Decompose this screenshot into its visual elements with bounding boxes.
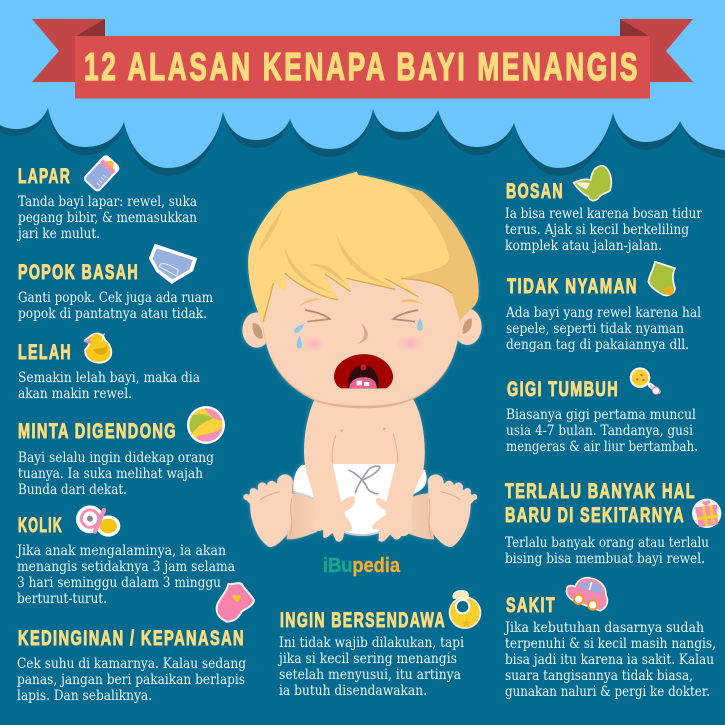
icon: baby onesie xyxy=(217,583,254,622)
icon: rubber duck xyxy=(83,333,111,363)
text: Bosan: komplek atau jalan-jalan. xyxy=(505,238,662,254)
text: Minta digendong: Bayi selalu ingin didekap orang xyxy=(18,450,214,466)
icon: rattle xyxy=(631,368,660,394)
section: Sakit xyxy=(503,594,716,700)
text: Minta digendong: Bunda dari dekat. xyxy=(18,482,127,498)
text: Lapar: jari ke mulut. xyxy=(16,226,100,242)
text: Kolik: menangis setidaknya 3 jam selama xyxy=(17,559,235,575)
heading: Kolik: KOLIK xyxy=(18,514,63,537)
heading: Gigi tumbuh: GIGI TUMBUH xyxy=(507,378,619,401)
icon: gift box xyxy=(692,499,721,528)
section: Kolik xyxy=(15,514,235,607)
text: Sakit: Jika kebutuhan dasarnya sudah xyxy=(503,620,704,636)
open mouth xyxy=(334,354,393,388)
heading: Lelah: LELAH xyxy=(18,341,72,364)
heading: Tidak nyaman: TIDAK NYAMAN xyxy=(507,275,638,298)
text: Lelah: Semakin lelah bayi, maka dia xyxy=(18,370,200,386)
text: Ingin bersendawa: Ini tidak wajib dilakukan, tapi xyxy=(279,635,465,651)
text: Bosan: Ia bisa rewel karena bosan tidur xyxy=(505,206,702,222)
text: Gigi tumbuh: mengeras & air liur bertambah. xyxy=(506,439,698,455)
heading: Bosan: BOSAN xyxy=(506,180,564,203)
heading: Ingin bersendawa: INGIN BERSENDAWA xyxy=(280,609,446,632)
sky with scalloped cloud edge xyxy=(0,0,725,176)
text: Kedinginan / Kepanasan: panas, jangan beri pakaikan berlapis xyxy=(17,672,245,688)
icon: baby bottle xyxy=(82,153,121,193)
text: Lelah: akan makin rewel. xyxy=(18,386,132,402)
section: Minta digendong xyxy=(18,420,214,498)
section: Ingin bersendawa xyxy=(277,609,465,699)
icons, left column top xyxy=(82,153,225,444)
text: Ingin bersendawa: ia butuh disendawakan. xyxy=(279,683,427,699)
icon: diaper xyxy=(149,244,197,283)
heading: Popok basah: POPOK BASAH xyxy=(18,261,139,284)
section: Lapar xyxy=(16,165,197,242)
text: Ingin bersendawa: jika si kecil sering menangis xyxy=(277,651,457,667)
heading: Kedinginan / Kepanasan: KEDINGINAN / KEPANASAN xyxy=(18,627,245,650)
text: Ingin bersendawa: setelah menyusui, itu artinya xyxy=(279,667,461,683)
text: Kolik: Jika anak mengalaminya, ia akan xyxy=(15,543,226,559)
baby head xyxy=(242,172,482,408)
icons, left column bottom xyxy=(76,505,254,622)
text: Kolik: 3 hari seminggu dalam 3 minggu xyxy=(17,575,221,591)
text: Kolik: berturut-turut. xyxy=(17,591,107,607)
icon: toy car xyxy=(566,578,607,611)
section: Gigi tumbuh xyxy=(506,378,698,455)
title ribbon xyxy=(32,19,693,98)
icons, right column top xyxy=(573,166,675,394)
hair xyxy=(248,172,479,323)
illustration: crying baby xyxy=(242,172,482,547)
logo: iBupedia: iBupedia xyxy=(323,555,401,577)
crying eyes and brows xyxy=(305,310,418,322)
text: Sakit: suara tangisannya tidak biasa, xyxy=(505,668,693,684)
icon: bib xyxy=(449,591,481,629)
text: Popok basah: popok di pantatnya atau tidak. xyxy=(18,306,207,322)
section: Kedinginan / Kepanasan xyxy=(17,627,246,704)
section: Tidak nyaman xyxy=(505,275,701,353)
nose xyxy=(356,323,368,344)
text: Tidak nyaman: dengan tag di pakaiannya dll. xyxy=(506,337,689,353)
icon: stroller xyxy=(573,166,611,201)
text: Tidak nyaman: Ada bayi yang rewel karena hal xyxy=(505,305,701,321)
text: Tidak nyaman: sepele, seperti tidak nyaman xyxy=(506,321,684,337)
text: Minta digendong: tuanya. Ia suka melihat wajah xyxy=(18,466,203,482)
icons, right column bottom xyxy=(449,499,721,629)
heading: Minta digendong: MINTA DIGENDONG xyxy=(18,420,177,443)
cheeks xyxy=(301,336,326,352)
tears xyxy=(294,317,423,348)
text: Kedinginan / Kepanasan: lapis. Dan sebaliknya. xyxy=(17,688,152,704)
icon: sock xyxy=(648,262,675,295)
icon: pacifier xyxy=(76,505,120,537)
text: Bosan: terus. Ajak si kecil berkeliling xyxy=(505,222,689,238)
section: Popok basah xyxy=(18,261,213,322)
text: Terlalu banyak hal baru: bising bisa membuat bayi rewel. xyxy=(505,551,705,567)
text: Kedinginan / Kepanasan: Cek suhu di kamarnya. Kalau sedang xyxy=(17,656,246,672)
text: Lapar: Tanda bayi lapar: rewel, suka xyxy=(18,194,197,210)
baby body xyxy=(243,398,477,547)
text: Popok basah: Ganti popok. Cek juga ada ruam xyxy=(18,290,213,306)
icon: beach ball xyxy=(187,406,225,444)
text: Lapar: pegang bibir, & memasukkan xyxy=(18,210,197,226)
text: Gigi tumbuh: usia 4-7 bulan. Tandanya, gusi xyxy=(506,423,694,439)
heading: Sakit: SAKIT xyxy=(506,594,556,617)
section: Lelah xyxy=(18,341,200,402)
section: Bosan xyxy=(505,180,702,254)
heading: Lapar: LAPAR xyxy=(18,165,71,188)
section: Terlalu banyak hal baru xyxy=(505,480,709,567)
text: Gigi tumbuh: Biasanya gigi pertama muncul xyxy=(506,407,696,423)
